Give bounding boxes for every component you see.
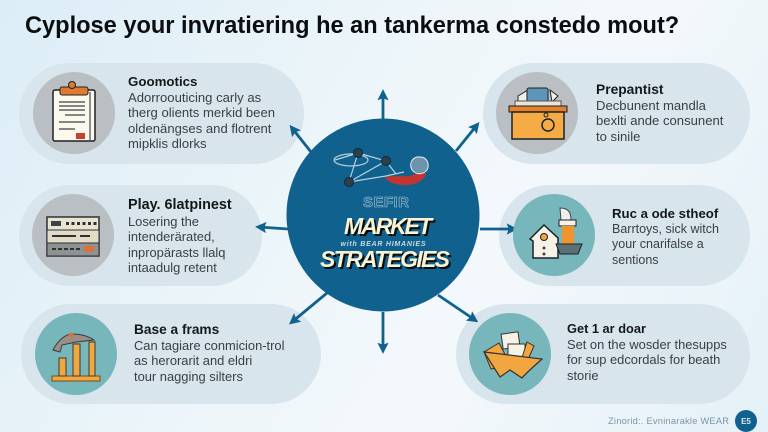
text: Prepantist — [596, 82, 724, 144]
text: Ruc a ode: Barrtoys, sick witch — [612, 222, 719, 236]
text: Base a frams — [134, 322, 284, 384]
text: Goomotics: oldenängses and flotrent — [128, 121, 271, 136]
text: Goomotics — [128, 74, 275, 151]
text: Goomotics: mipklis dlorks — [128, 136, 207, 151]
text: Get a door: Set on the wosder thesupps — [567, 337, 727, 352]
icon: columns — [35, 313, 117, 395]
heading: STRATEGIES: STRATEGIES — [320, 246, 451, 272]
text: Ruc a ode: sentions — [612, 253, 659, 267]
text: Play platform — [128, 197, 232, 275]
icon: server rack — [32, 194, 114, 276]
text: Play platform: Play. 6latpinest — [128, 197, 232, 213]
text: Goomotics: therg olients merkid been — [128, 105, 275, 120]
icon: house and tower — [513, 194, 595, 276]
title: Cyplose your invratiering he an tankerma constedo mout? — [25, 13, 679, 39]
text: Play platform: inpropärasts llalq — [128, 245, 225, 260]
text: Play platform: intenderärated, — [128, 229, 215, 244]
text: Base a frams: Can tagiare conmicion-trol — [134, 338, 284, 353]
icon: clipboard — [33, 72, 115, 154]
panel: Goomotics — [19, 63, 304, 164]
text: Goomotics: Adorroouticing carly as — [128, 90, 261, 105]
arrows from central circle — [259, 93, 514, 350]
text: Prepantist: to sinile — [596, 129, 640, 144]
text: Base a frams: as herorarit and eldri — [134, 353, 252, 368]
icon: open box with papers — [469, 313, 551, 395]
small label: SEFIR — [363, 194, 409, 211]
text: Prepantist: Decbunent mandla — [596, 98, 706, 113]
heading: STRATEGIES: STRATEGIES — [322, 248, 453, 274]
footer text: Zinorid:. Evninarakle WEAR — [608, 416, 729, 426]
text: Goomotics: Goomotics — [128, 74, 197, 89]
heading: MARKET: MARKET — [346, 215, 436, 241]
text: Get a door: storie — [567, 368, 599, 383]
text: Ruc a ode: your cnarifalse a — [612, 237, 704, 251]
panel: Get a door — [456, 304, 750, 404]
panel: Prepantist — [483, 63, 750, 164]
icon: desk with money — [496, 72, 578, 154]
text: Prepantist: bexlti ande consunent — [596, 113, 723, 128]
text: Base a frams: tour nagging silters — [134, 369, 243, 384]
text: Ruc a ode: Ruc a ode stheof — [612, 206, 718, 221]
text: Get a door: Get 1 ar doar — [567, 321, 646, 336]
text: Play platform: intaadulg retent — [128, 260, 217, 275]
small subtitle: with BEAR HIMANIES — [340, 241, 426, 248]
heading: MARKET: MARKET — [344, 213, 434, 239]
central circle — [286, 118, 480, 312]
network illustration — [334, 148, 428, 186]
panel: Play platform — [19, 185, 262, 286]
footer badge: E5 — [741, 417, 751, 426]
panel: Ruc a ode — [499, 185, 750, 286]
text: Base a frams: Base a frams — [134, 322, 219, 337]
text: Play platform: Losering the — [128, 214, 199, 229]
text: Prepantist: Prepantist — [596, 82, 663, 97]
footer badge — [735, 410, 757, 432]
text: Get a door: for sup edcordals for beath — [567, 352, 720, 367]
text: Get a door — [567, 321, 727, 383]
text: Ruc a ode — [612, 206, 719, 267]
panel: Base a frams — [21, 304, 321, 404]
